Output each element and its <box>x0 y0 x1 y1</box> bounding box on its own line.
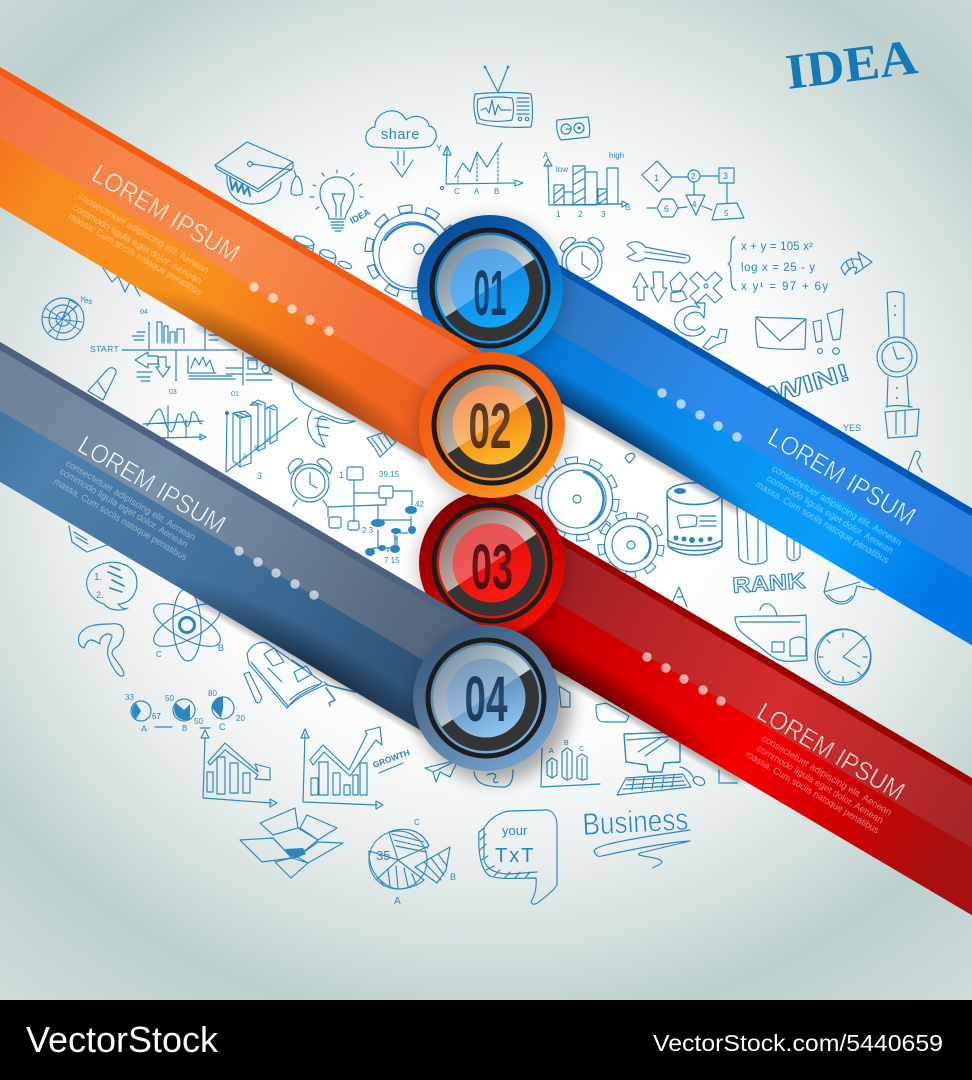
doodle: small pie charts: 67 <box>152 712 161 721</box>
doodle: falling bars chart <box>201 730 277 807</box>
doodle: chevron <box>367 432 396 457</box>
doodle: flow chart: 1 <box>654 173 659 183</box>
doodle: tree diagram: 39,15 <box>379 470 400 479</box>
doodle: equations: log x = 25 - y <box>741 262 815 274</box>
doodle: mini bars: C <box>579 746 584 753</box>
doodle: wrist watch <box>843 292 919 438</box>
band text: orange <box>67 158 245 298</box>
doodle: flow chart: 3 <box>723 171 728 181</box>
doodle: tree diagram: 3 <box>257 471 262 481</box>
doodle: growth chart <box>301 727 411 809</box>
doodle: share cloud <box>366 111 436 177</box>
doodle: bar chart: 1 <box>556 210 561 219</box>
footer brand: VectorStock <box>26 1019 219 1060</box>
doodle: small pie charts: 50 <box>194 717 203 726</box>
doodle: bar chart: 2 <box>578 210 583 219</box>
doodle: paper plane <box>425 760 458 782</box>
button 02: 02 <box>468 390 512 462</box>
dots: red band <box>642 652 726 706</box>
doodle: envelope <box>756 317 806 349</box>
doodle: scallop shapes under orange band <box>103 234 353 296</box>
doodle: bar chart: 3 <box>601 210 606 219</box>
doodle: briefcase <box>735 604 807 661</box>
doodle: television <box>474 66 532 127</box>
doodle: rocket sketch <box>88 368 116 400</box>
heading: gray band: LOREM IPSUM <box>73 429 231 539</box>
band text: gray <box>52 429 231 563</box>
body text: red band: consectetuer adipiscing elit. Aenean <box>760 732 894 817</box>
doodle: arrows set <box>633 272 722 303</box>
doodle: small pie charts: C <box>219 722 226 732</box>
body text: gray band: consectetuer adipiscing elit. Aenean <box>64 457 198 542</box>
doodle: circular arrow <box>675 303 727 350</box>
body text: blue band: massa. Cum sociis natoque penatibus <box>754 478 892 566</box>
doodle: alarm clock top <box>560 238 604 282</box>
doodle: small pie charts: 20 <box>236 714 245 723</box>
doodle: speech bubble list: 1. <box>94 572 102 583</box>
doodle: small pie charts <box>125 689 245 734</box>
doodle: wrench <box>627 242 690 263</box>
doodle: atom: C <box>156 650 162 659</box>
doodle: flow chart: 4 <box>692 200 697 209</box>
doodle: start flow chart: 03 <box>169 389 177 396</box>
doodle: mini bars <box>541 740 600 787</box>
doodle: line chart: A <box>474 187 480 196</box>
doodle: start flow chart <box>90 309 272 398</box>
doodle: share cloud: share <box>381 127 420 143</box>
doodle: glasses <box>824 572 876 604</box>
doodle: bar chart: B <box>625 203 630 212</box>
doodle: equations: x y¹ = 97 + 6y <box>741 281 828 293</box>
body text: gray band: commodo ligula eget dolor. Aenean <box>58 465 190 549</box>
doodle: business lettering: Business <box>582 801 689 842</box>
band shadows: upper pair <box>195 318 743 513</box>
doodle: speech bubble list: 2. <box>96 590 104 600</box>
doodle: wrist watch: YES <box>843 423 861 433</box>
doodle: bar chart: high <box>609 151 624 160</box>
doodle: start flow chart: START <box>90 344 119 354</box>
doodle: wall clock <box>815 629 871 685</box>
band shadows: lower pair <box>195 593 745 784</box>
doodle: small icon box <box>474 770 513 787</box>
band: gray (04) <box>0 342 480 731</box>
doodle: atom: B <box>218 643 224 653</box>
band text: blue <box>754 421 921 566</box>
doodle: RANK lettering: RANK <box>732 568 806 598</box>
doodle: pencils <box>737 507 800 564</box>
doodle: open box <box>240 808 343 878</box>
doodle: small pie charts: 33 <box>125 693 134 702</box>
doodle: graduation cap <box>215 142 302 204</box>
doodle: bar chart: low <box>556 165 568 174</box>
doodle: growth chart: GROWTH <box>371 747 411 770</box>
doodle: small pie charts: A <box>141 724 147 734</box>
doodle: flow chart: 5 <box>724 209 729 218</box>
button 01 <box>414 215 566 368</box>
doodle: tree diagram: 7 <box>393 536 398 545</box>
footer image id: VectorStock.com/5440659 <box>653 1030 943 1056</box>
doodle: light bulb: IDEA <box>348 207 372 226</box>
button 02 <box>416 352 568 505</box>
body text: gray band: massa. Cum sociis natoque penatibus <box>52 475 190 563</box>
doodle: exclamation marks <box>813 309 843 354</box>
body text: orange band: consectetuer adipiscing elit. Aenean <box>77 190 211 275</box>
doodles <box>42 28 922 907</box>
body text: blue band: commodo ligula eget dolor. Aenean <box>765 472 896 555</box>
doodle: pie chart <box>369 818 456 907</box>
button 03 <box>416 490 568 643</box>
doodle: mini bars: B <box>564 740 569 747</box>
doodle: tree diagram: 42 <box>415 500 424 509</box>
doodle: small hatched arrow <box>841 252 872 275</box>
doodle: pie chart: C <box>414 818 420 827</box>
doodle: start flow chart: 04 <box>140 309 148 316</box>
doodle: partly hidden notes <box>559 686 737 783</box>
doodle: your text bubble: TxT <box>495 845 535 867</box>
doodle: start flow chart: 01 <box>231 391 239 398</box>
band: orange (02) <box>0 67 484 460</box>
doodle: desktop computer <box>617 732 706 795</box>
doodle: small pie charts: B <box>182 724 187 733</box>
doodle: tree diagram: 2 3 <box>362 526 374 535</box>
doodle: tree diagram <box>257 467 424 565</box>
doodle: pie chart: B <box>450 872 456 882</box>
doodle: gears lower <box>538 453 661 575</box>
doodle: pie chart: A <box>394 896 401 907</box>
doodle: flow chart <box>642 161 744 220</box>
footer bar <box>0 1000 972 1080</box>
doodle: large gear top <box>368 208 456 296</box>
doodle: 3D bar chart: B <box>254 445 258 452</box>
doodle: pie chart: 35 <box>376 848 390 863</box>
body text: orange band: commodo ligula eget dolor. Aenean <box>71 201 204 286</box>
band: blue (01) <box>516 264 972 646</box>
doodle: equations <box>728 237 828 293</box>
doodle: speech bubble list <box>87 562 137 610</box>
doodle: spiral target: Yes <box>78 294 93 306</box>
doodle: open book and pen <box>244 642 355 708</box>
doodle: can <box>667 483 722 555</box>
button 01: 01 <box>474 257 506 329</box>
doodle: hand drawn three <box>79 624 124 676</box>
doodle: line chart: B <box>494 187 499 196</box>
doodle: 3D bar chart: C <box>266 437 271 444</box>
doodle: line chart: C <box>454 187 460 196</box>
doodle: thumb mark <box>907 451 922 473</box>
doodle: small pie charts: 80 <box>208 689 217 698</box>
doodle: IDEA lettering: IDEA <box>783 28 920 100</box>
doodle: WIN text: WIN! <box>767 359 853 409</box>
button 03: 03 <box>471 531 513 603</box>
doodle: wave chart <box>143 406 206 440</box>
doodle: tree diagram: 7 15 <box>384 556 400 565</box>
dots: gray band <box>234 546 319 600</box>
dots: orange band <box>249 282 334 336</box>
doodle: bar chart: A <box>543 151 549 160</box>
doodle: 3D bar chart <box>225 400 297 472</box>
doodle: atom <box>148 589 226 661</box>
doodle: mini bars: A <box>549 748 554 755</box>
doodle: tree diagram: 1 <box>339 470 344 480</box>
doodle: spiral target <box>42 294 93 340</box>
heading: red band: LOREM IPSUM <box>752 696 910 806</box>
heading: blue band: LOREM IPSUM <box>763 421 921 531</box>
doodle: alarm clock left <box>288 459 332 506</box>
dots: blue band <box>657 388 742 442</box>
doodle: light bulb <box>310 170 372 231</box>
doodle: flow chart: 6 <box>664 204 669 214</box>
doodle: business lettering <box>582 801 690 868</box>
band text: red <box>744 696 910 836</box>
body text: blue band: consectetuer adipiscing elit. Aenean <box>770 462 904 547</box>
doodle: ribbon shape <box>292 383 355 447</box>
doodle: bar chart <box>543 151 630 219</box>
doodle: flow chart: 2 <box>691 172 696 181</box>
doodle: your text bubble: your <box>502 823 528 838</box>
doodle: paper sheet <box>69 526 107 552</box>
button 04: 04 <box>464 663 508 735</box>
doodle: line chart <box>436 143 523 196</box>
body text: red band: massa. Cum sociis natoque penatibus <box>744 748 882 836</box>
doodle: small pie charts: 50 <box>165 694 174 703</box>
body text: red band: commodo ligula eget dolor. Aenean <box>755 742 886 825</box>
body text: orange band: massa. Cum sociis natoque penatibus <box>67 210 205 298</box>
doodle: equations: x + y = 105 x² <box>741 241 813 253</box>
doodle: triangle sign <box>670 587 687 607</box>
band: red (03) <box>516 534 972 916</box>
doodle: line chart: Y <box>436 143 442 153</box>
doodle: 3D bar chart: A <box>243 453 248 460</box>
doodle: your text bubble <box>479 810 557 904</box>
doodle: GO badge <box>557 117 590 140</box>
heading: orange band: LOREM IPSUM <box>87 158 245 268</box>
button 04 <box>413 625 572 782</box>
